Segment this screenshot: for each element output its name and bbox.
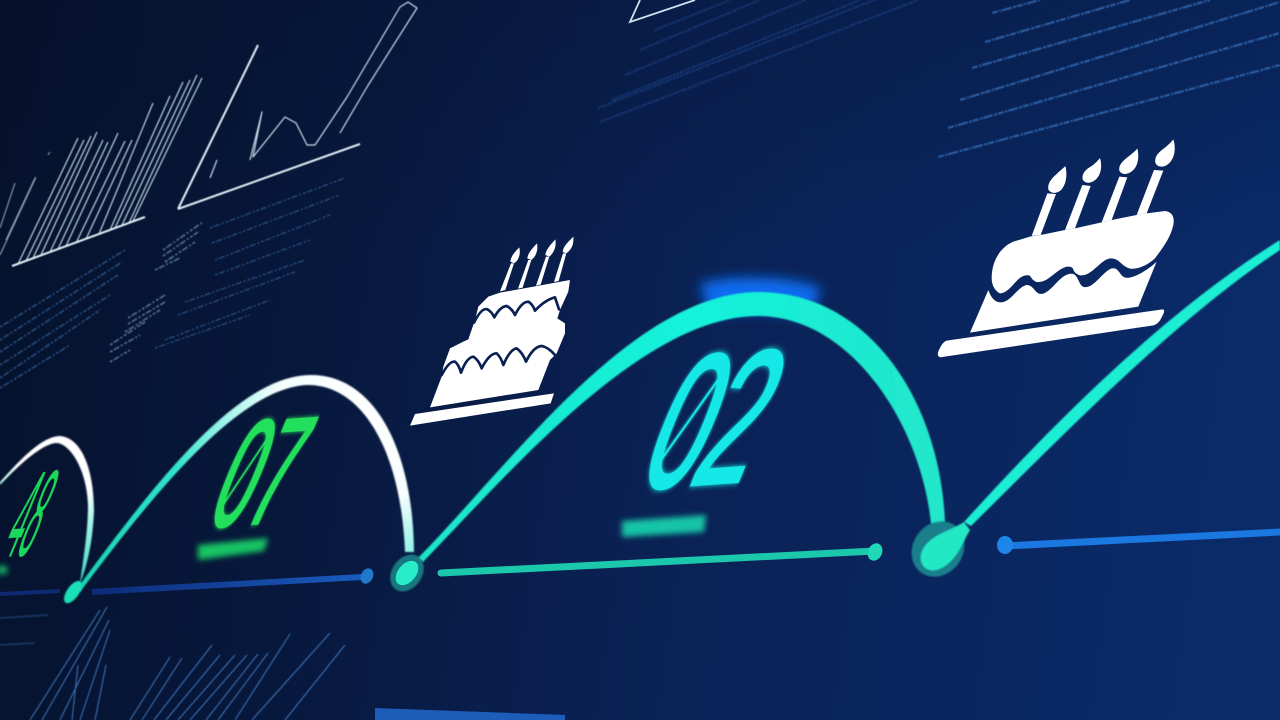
number shadow dashes (0, 515, 706, 575)
line chart: top left (178, 2, 417, 209)
line chart curve (210, 2, 417, 178)
number 07: 07 (191, 385, 333, 560)
cake icing (992, 211, 1174, 293)
triangle chart corner: top middle (630, 0, 695, 22)
flames (1048, 139, 1175, 193)
bottom chart: lower left (0, 607, 345, 720)
cake plate (410, 393, 554, 426)
bottom blue bar (375, 708, 565, 720)
icon: one-tier birthday cake (938, 139, 1175, 357)
node: 02/right (901, 511, 975, 587)
cake body (970, 262, 1157, 333)
arc: 48 (0, 436, 94, 592)
text block: top right (938, 0, 1280, 157)
line chart axes (178, 45, 360, 209)
arc: 07 (76, 375, 414, 592)
baseline: right (997, 532, 1280, 554)
baseline: 02 (441, 541, 885, 573)
candles (1032, 170, 1163, 236)
number 02: 02 (617, 308, 809, 530)
baseline: far left (0, 591, 60, 594)
arc: right (964, 240, 1280, 526)
node: 07/02 (383, 548, 431, 598)
bar chart: top left (0, 75, 202, 266)
icon: two-tier birthday cake (410, 237, 573, 426)
flames (510, 237, 573, 263)
text block: under charts left (0, 178, 345, 388)
icing waves (442, 297, 559, 375)
cake plate (938, 309, 1164, 357)
baseline: 07 (92, 566, 376, 592)
arc: 02 (418, 292, 945, 562)
candles (500, 253, 566, 291)
node: 48/07 (61, 578, 85, 606)
arc glow: 02 (705, 294, 815, 304)
text block: top middle (598, 0, 918, 122)
cake silhouette (430, 280, 570, 407)
bar chart axis (12, 217, 145, 266)
